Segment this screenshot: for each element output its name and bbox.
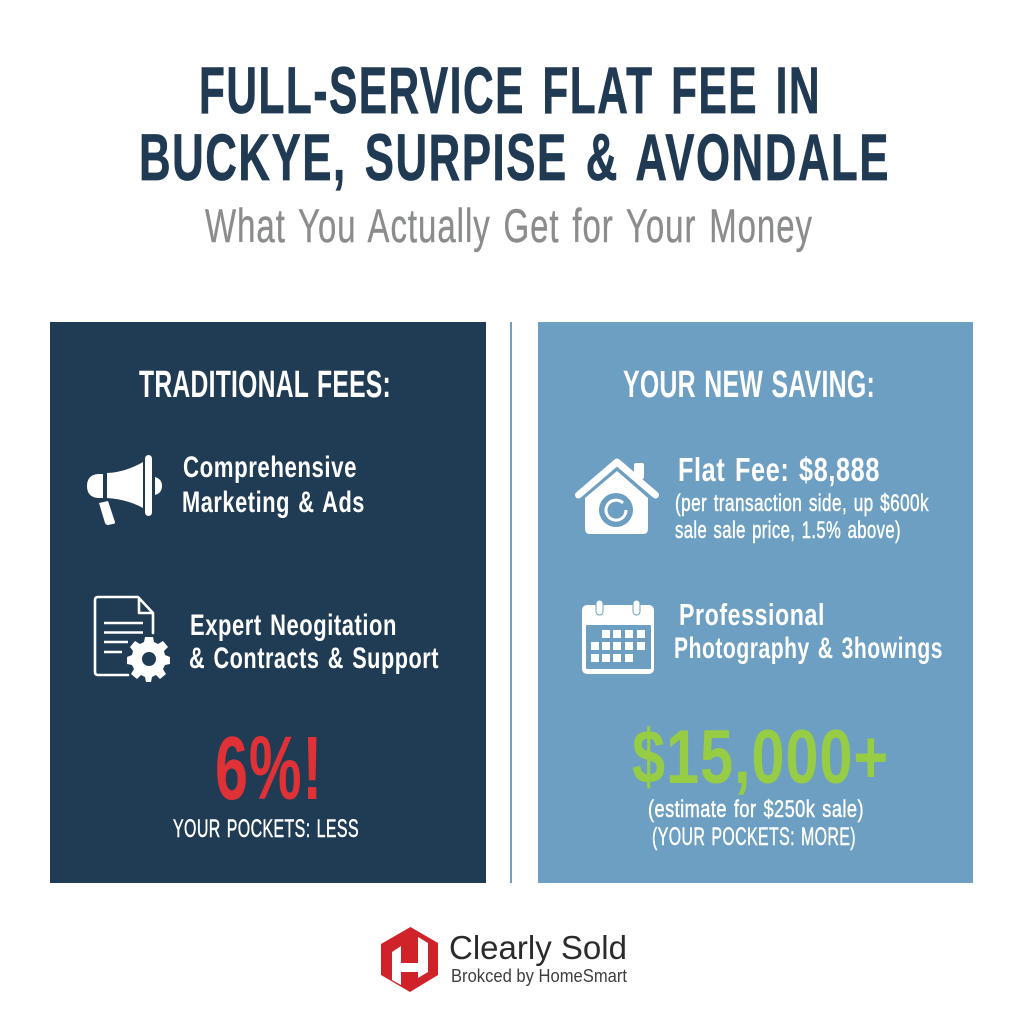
panel: traditional fees [50, 322, 486, 883]
icon: document with gear [95, 597, 170, 682]
logo: Clearly Sold [381, 927, 627, 992]
text: flat fee: sale sale price, 1.5% above) [675, 517, 901, 544]
caption: pockets less: YOUR POCKETS: LESS [173, 815, 359, 843]
icon: house [578, 462, 656, 534]
text: flat fee: Flat Fee: $8,888 [678, 451, 880, 488]
text: photography [674, 597, 943, 665]
stat: savings amount: $15,000+ [632, 715, 889, 800]
text: marketing: Comprehensive [183, 451, 357, 484]
panel: new saving [538, 322, 973, 883]
text: negotiation: Expert Neogitation [190, 609, 397, 642]
stat: six percent: 6%! [215, 719, 323, 819]
text: marketing [182, 451, 365, 519]
text: flat fee [675, 451, 929, 544]
wordmark: Clearly Sold [449, 929, 627, 966]
text: negotiation: & Contracts & Support [189, 642, 439, 675]
text: photography: Professional [679, 597, 825, 632]
text: flat fee: (per transaction side, up $600k [675, 490, 929, 517]
caption: savings estimate [648, 796, 864, 851]
heading: traditional fees: TRADITIONAL FEES: [139, 364, 391, 406]
icon: megaphone [87, 455, 162, 525]
text: marketing: Marketing & Ads [182, 486, 365, 519]
heading: new saving: YOUR NEW SAVING: [623, 364, 875, 406]
divider [510, 322, 512, 883]
caption: savings estimate: (estimate for $250k sale) [648, 796, 864, 823]
title [139, 53, 890, 194]
tagline: Brokced by HomeSmart [451, 966, 627, 986]
text: negotiation [189, 609, 439, 675]
icon: calendar [582, 600, 654, 674]
icon: hexagon H mark [381, 927, 438, 992]
caption: savings estimate: (YOUR POCKETS: MORE) [652, 823, 856, 851]
